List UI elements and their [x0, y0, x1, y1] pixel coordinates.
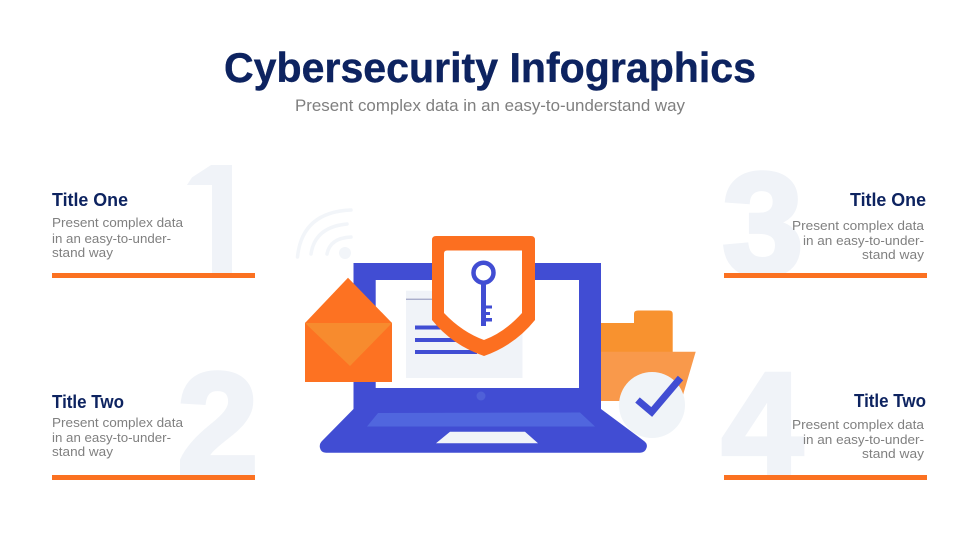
text block: item 3 — [792, 218, 925, 262]
text block: item 1 — [52, 215, 184, 260]
illustration: laptop — [320, 263, 647, 453]
text block: item 1: stand way — [52, 245, 114, 260]
heading: item 1: Title One — [52, 190, 128, 210]
key — [474, 263, 494, 326]
orange rule: item 1 — [52, 273, 255, 278]
heading: item 3: Title One — [850, 190, 926, 210]
text block: item 1: Present complex data — [52, 215, 184, 230]
panel: item 2 — [52, 343, 258, 505]
text block: item 1: in an easy-to-under- — [52, 231, 171, 246]
panel: item 1 — [52, 165, 255, 278]
heading: item 4: Title Two — [854, 391, 926, 411]
icon: shield with key — [432, 236, 535, 356]
text block: item 2: Present complex data — [52, 415, 184, 430]
text block: item 3: in an easy-to-under- — [803, 233, 924, 248]
title: Cybersecurity Infographics — [224, 44, 756, 91]
text block: item 4: Present complex data — [792, 417, 925, 432]
laptop screen — [354, 263, 601, 413]
text block: item 3: stand way — [862, 247, 925, 262]
text block: item 4 — [792, 417, 925, 461]
orange rule: item 4 — [724, 475, 927, 480]
icon: wifi signal — [298, 210, 351, 259]
webcam — [476, 392, 486, 400]
trackpad — [436, 432, 538, 443]
number 1: 1 — [175, 135, 261, 308]
orange rule: item 3 — [724, 273, 927, 278]
keyboard — [367, 412, 595, 426]
number 3: 3 — [722, 143, 803, 305]
text block: item 2: in an easy-to-under- — [52, 430, 171, 445]
icon: envelope — [305, 278, 392, 382]
icon: check badge — [619, 372, 685, 438]
text block: item 2: stand way — [52, 444, 114, 459]
panel: item 3 — [722, 143, 927, 305]
number 2: 2 — [178, 343, 258, 505]
subtitle: Present complex data in an easy-to-understand way — [295, 96, 685, 115]
document on screen — [406, 291, 522, 378]
icon: folder — [601, 310, 696, 401]
text block: item 4: in an easy-to-under- — [803, 432, 924, 447]
text block: item 2 — [52, 415, 184, 459]
panel: item 4 — [722, 343, 927, 505]
text block: item 3: Present complex data — [792, 218, 925, 233]
orange rule: item 2 — [52, 475, 255, 480]
heading: item 2: Title Two — [52, 392, 124, 412]
number 4: 4 — [722, 343, 803, 505]
laptop base — [320, 409, 647, 453]
text block: item 4: stand way — [862, 446, 925, 461]
